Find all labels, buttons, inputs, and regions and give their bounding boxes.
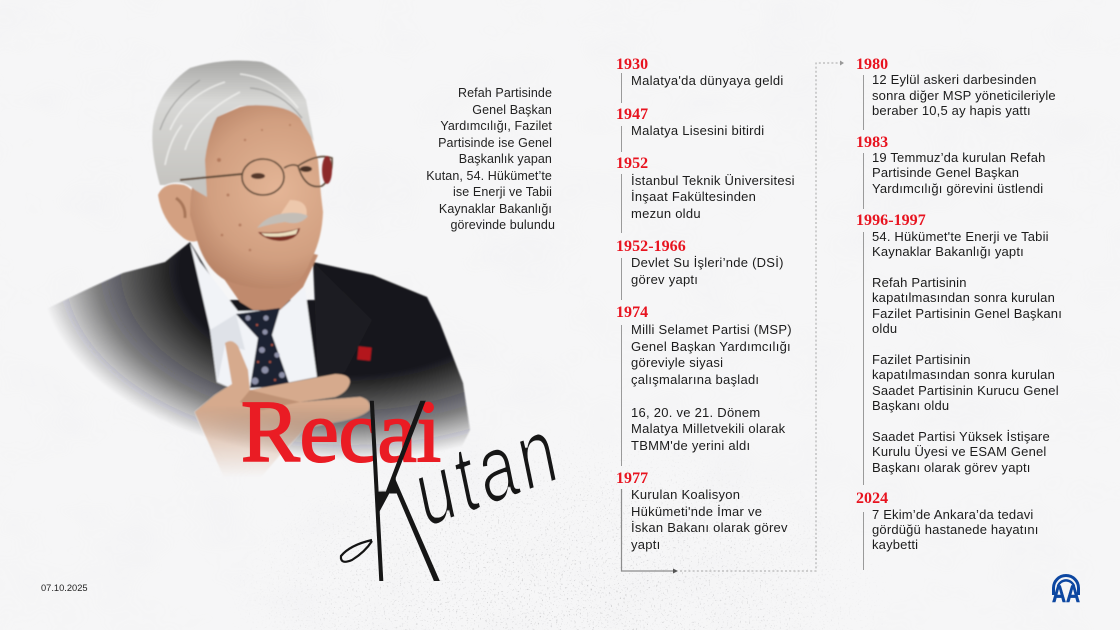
1947 xyxy=(616,106,764,152)
1952: İstanbul Teknik Üniversitesi xyxy=(631,173,795,188)
1930 xyxy=(616,56,784,103)
1996-1997: Saadet Partisinin Kurucu Genel xyxy=(872,383,1059,398)
1974: çalışmalarına başladı xyxy=(631,372,759,387)
neck xyxy=(197,240,318,310)
1952: mezun oldu xyxy=(631,206,701,221)
1952: İnşaat Fakültesinden xyxy=(631,189,756,204)
1996-1997: Kurulu Üyesi ve ESAM Genel xyxy=(872,444,1046,459)
intro text block: Kaynaklar Bakanlığı xyxy=(439,202,552,216)
1996-1997: oldu xyxy=(872,321,897,336)
1974: Milli Selamet Partisi (MSP) xyxy=(631,322,792,337)
1996-1997: kapatılmasından sonra kurulan xyxy=(872,367,1055,382)
ear xyxy=(158,184,200,242)
intro text block: Kutan, 54. Hükümet’te xyxy=(426,168,552,182)
shirt xyxy=(190,243,317,392)
1996-1997: kapatılmasından sonra kurulan xyxy=(872,290,1055,305)
2024: 7 Ekim’de Ankara’da tedavi xyxy=(872,507,1034,522)
1977: 1977 xyxy=(616,470,648,487)
moustache xyxy=(257,213,308,228)
1952-1966: Devlet Su İşleri’nde (DSİ) xyxy=(631,255,784,270)
date: 07.10.2025 xyxy=(41,583,88,593)
1930: 1930 xyxy=(616,56,648,73)
title signature surname: K xyxy=(353,342,449,630)
intro text block xyxy=(426,86,555,232)
1930: Malatya'da dünyaya geldi xyxy=(631,73,784,88)
1996-1997: 54. Hükümet'te Enerji ve Tabii xyxy=(872,229,1049,244)
1996-1997: Refah Partisinin xyxy=(872,275,967,290)
1952-1966: 1952-1966 xyxy=(616,238,686,255)
intro text block: Yardımcılığı, Fazilet xyxy=(440,119,552,133)
intro text block: ise Enerji ve Tabii xyxy=(453,185,552,199)
portrait photo of Recai Kutan xyxy=(50,60,470,472)
title signature surname xyxy=(341,342,575,630)
1980: sonra diğer MSP yöneticileriyle xyxy=(872,88,1056,103)
1980: beraber 10,5 ay hapis yattı xyxy=(872,103,1031,118)
timeline column 1 xyxy=(616,56,795,552)
1983 xyxy=(856,134,1046,209)
2024 xyxy=(856,490,1039,570)
1996-1997: Saadet Partisi Yüksek İstişare xyxy=(872,429,1050,444)
1952 xyxy=(616,155,795,233)
1977 xyxy=(616,470,788,552)
intro text block: görevinde bulundu xyxy=(450,218,555,232)
intro text block: Refah Partisinde xyxy=(458,86,552,100)
timeline column 2 xyxy=(856,56,1062,570)
1974 xyxy=(616,304,792,466)
1947: Malatya Lisesini bitirdi xyxy=(631,123,764,138)
glasses xyxy=(180,157,332,195)
hair xyxy=(152,60,314,197)
hand xyxy=(194,340,370,472)
title signature surname: utan xyxy=(399,398,575,546)
title first name: Recai xyxy=(241,384,441,481)
1977: Hükümeti'nde İmar ve xyxy=(631,504,762,519)
1996-1997: Fazilet Partisinin xyxy=(872,352,971,367)
1996-1997 xyxy=(856,212,1062,485)
intro text block: Partisinde ise Genel xyxy=(438,136,552,150)
1980: 1980 xyxy=(856,56,888,73)
1983: Yardımcılığı görevini üstlendi xyxy=(872,181,1043,196)
tie xyxy=(236,308,290,388)
1983: 19 Temmuz’da kurulan Refah xyxy=(872,150,1046,165)
1974: Genel Başkan Yardımcılığı xyxy=(631,339,791,354)
2024: 2024 xyxy=(856,490,888,507)
intro text block: Genel Başkan xyxy=(472,102,552,116)
2024: gördüğü hastanede hayatını xyxy=(872,522,1039,537)
1974: 1974 xyxy=(616,304,648,321)
1996-1997: 1996-1997 xyxy=(856,212,926,229)
1974: Malatya Milletvekili olarak xyxy=(631,421,785,436)
1983: Partisinde Genel Başkan xyxy=(872,165,1019,180)
1996-1997: Başkanı oldu xyxy=(872,398,949,413)
1952: 1952 xyxy=(616,155,648,172)
1983: 1983 xyxy=(856,134,888,151)
mouth xyxy=(258,228,300,241)
1996-1997: Fazilet Partisinin Genel Başkanı xyxy=(872,306,1062,321)
1952-1966 xyxy=(616,238,784,300)
1977: yaptı xyxy=(631,537,660,552)
1980: 12 Eylül askeri darbesinden xyxy=(872,72,1037,87)
2024: kaybetti xyxy=(872,537,918,552)
face xyxy=(190,103,323,288)
1974: göreviyle siyasi xyxy=(631,355,723,370)
1947: 1947 xyxy=(616,106,648,123)
background: paper texture and speckles xyxy=(264,454,854,630)
intro text block: Başkanlık yapan xyxy=(459,152,552,166)
suit jacket xyxy=(50,242,470,458)
1974: 16, 20. ve 21. Dönem xyxy=(631,405,760,420)
1952-1966: görev yaptı xyxy=(631,272,698,287)
1974: TBMM'de yerini aldı xyxy=(631,438,750,453)
1977: Kurulan Koalisyon xyxy=(631,487,740,502)
1977: İskan Bakanı olarak görev xyxy=(631,520,788,535)
1980 xyxy=(856,56,1056,130)
1996-1997: Kaynaklar Bakanlığı yaptı xyxy=(872,244,1024,259)
1996-1997: Başkanı olarak görev yaptı xyxy=(872,460,1031,475)
lapel pin xyxy=(357,346,372,361)
